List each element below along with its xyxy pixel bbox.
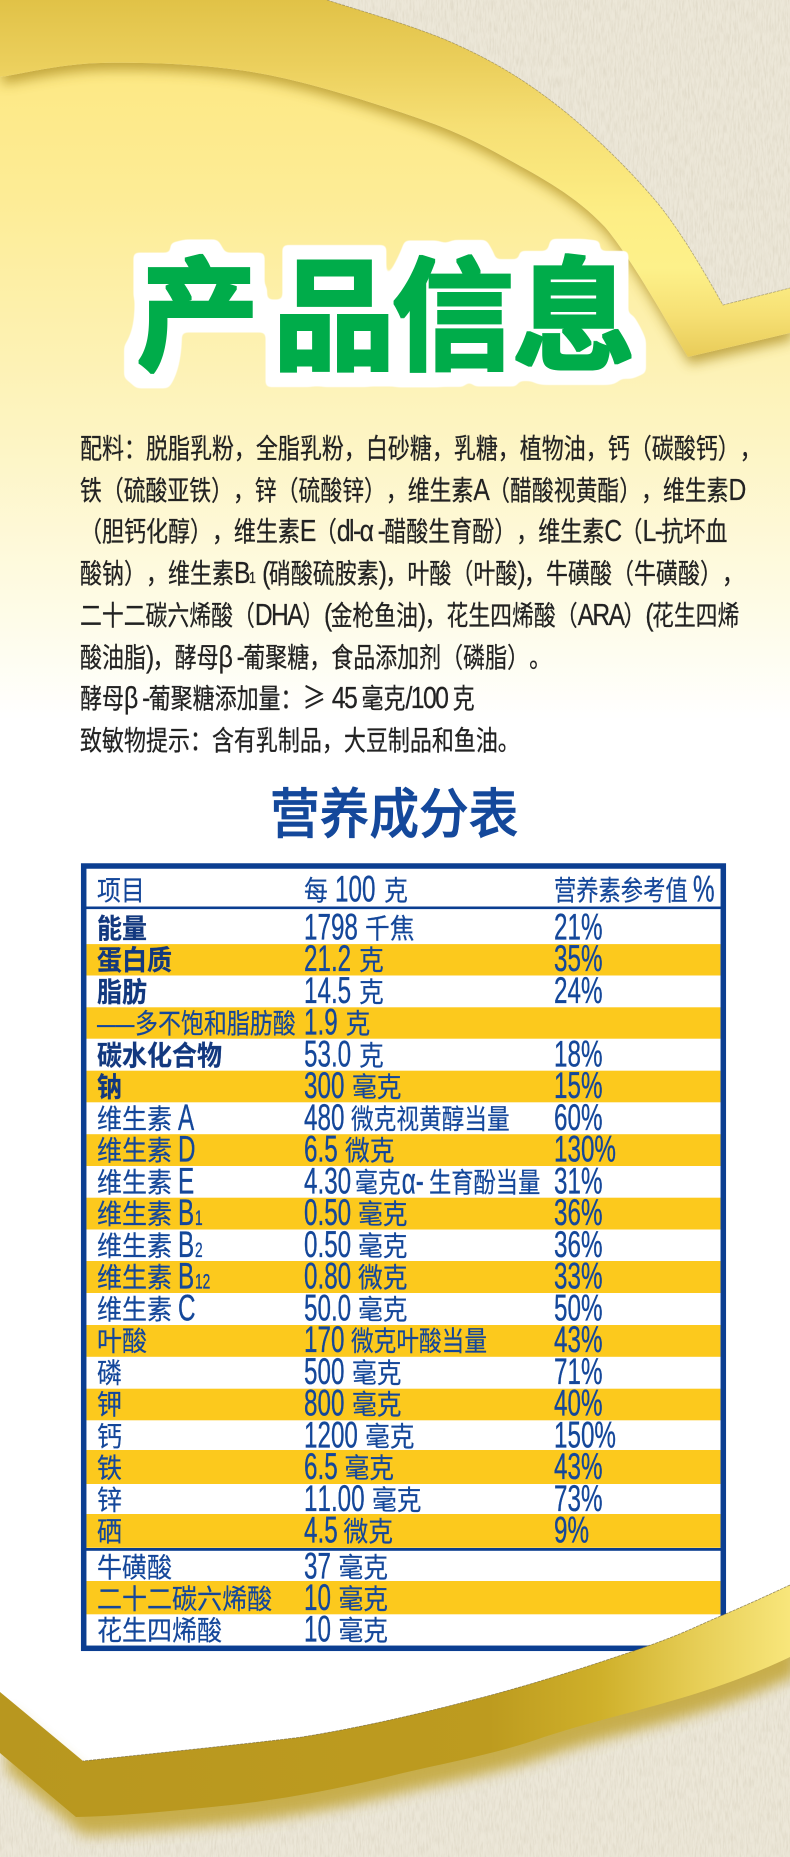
row: 维生素 B2: 2 <box>195 1238 203 1262</box>
nutrition table <box>84 866 723 1650</box>
row: 牛磺酸: 毫克 <box>338 1552 388 1583</box>
row: 维生素 B12: 微克 <box>358 1262 407 1294</box>
row: 钠: 毫克 <box>352 1071 401 1103</box>
row: 维生素 C: 50% <box>554 1287 602 1329</box>
row: 钾 <box>86 1383 720 1424</box>
row: 钙: 钙 <box>97 1421 122 1452</box>
table header row <box>97 869 715 910</box>
row: 脂肪: 14.5 <box>304 970 351 1011</box>
ingredients text block: 致敏物提示：含有乳制品，大豆制品和鱼油。 <box>80 726 520 757</box>
row: 维生素 C <box>97 1287 602 1329</box>
title: 产品信息: 产品信息 <box>137 250 635 386</box>
row: 维生素 A: 60% <box>554 1097 602 1138</box>
row: 铁: 毫克 <box>344 1452 394 1484</box>
row: 碳水化合物: 碳水化合物 <box>97 1040 222 1071</box>
row: 钙: 150% <box>554 1414 616 1456</box>
row: 维生素 B1: 0.50 <box>304 1192 351 1233</box>
row: 牛磺酸: 37 <box>304 1545 331 1587</box>
row: 花生四烯酸: 10 <box>304 1609 331 1650</box>
row: 二十二碳六烯酸: 10 <box>304 1577 331 1618</box>
shadow cast by top ribbon on the panel <box>0 62 790 372</box>
row: 锌: 11.00 <box>304 1478 365 1519</box>
row: 维生素 B12: 33% <box>554 1256 602 1297</box>
row: 维生素 B2: 毫克 <box>358 1230 407 1262</box>
ingredients text block: 铁（硫酸亚铁），锌（硫酸锌），维生素A（醋酸视黄酯），维生素D <box>80 472 745 507</box>
row: 硒: 9% <box>554 1510 589 1551</box>
row: 蛋白质: 35% <box>554 938 602 979</box>
row: 碳水化合物: 18% <box>554 1033 602 1075</box>
row: 维生素 A: A <box>178 1097 194 1138</box>
row: 维生素 E: 31% <box>554 1160 602 1202</box>
ingredients text block: （胆钙化醇），维生素E（dl-α -醋酸生育酚），维生素C（L-抗坏血 <box>80 513 727 548</box>
row: 维生素 B2: 维生素 <box>97 1230 172 1262</box>
row: 维生素 B1: 毫克 <box>358 1198 407 1230</box>
row: 能量: 1798 <box>304 906 358 948</box>
row: 钠: 15% <box>554 1065 602 1106</box>
top ribbon band <box>0 0 790 357</box>
row: 脂肪: 脂肪 <box>97 976 147 1008</box>
table header row: % <box>693 869 715 910</box>
row: 铁 <box>86 1446 720 1487</box>
row: 钙: 1200 <box>304 1414 358 1456</box>
row: 能量 <box>97 906 602 948</box>
table header row: 每 <box>304 876 328 907</box>
row: 铁: 6.5 <box>304 1446 338 1487</box>
row: 花生四烯酸 <box>97 1609 388 1650</box>
row: 维生素 D <box>86 1128 720 1170</box>
row: 二十二碳六烯酸: 二十二碳六烯酸 <box>97 1583 272 1615</box>
row: 维生素 C: 维生素 <box>97 1294 172 1325</box>
row: 维生素 D: 6.5 <box>304 1128 338 1170</box>
row: 维生素 E <box>97 1160 602 1202</box>
ingredients text block: 酸油脂)，酵母β -葡聚糖，食品添加剂（磷脂）。 <box>80 639 551 674</box>
row: 维生素 B12: 0.80 <box>304 1256 351 1297</box>
row: 叶酸: 微克叶酸当量 <box>351 1327 487 1357</box>
row: 硒: 4.5 <box>304 1510 338 1551</box>
row: 维生素 C: 50.0 <box>304 1287 351 1329</box>
row: 叶酸: 170 <box>304 1319 344 1360</box>
row: 碳水化合物 <box>97 1033 602 1075</box>
row: 锌: 毫克 <box>372 1484 421 1516</box>
row: 维生素 B12 <box>86 1256 720 1297</box>
row: 钠 <box>86 1065 720 1106</box>
row: 维生素 C: C <box>178 1287 196 1329</box>
row: 维生素 D: 维生素 <box>97 1135 172 1166</box>
row: 维生素 B2: B <box>178 1224 194 1265</box>
row: 多不饱和脂肪酸: 1.9 <box>304 1001 338 1043</box>
row: 维生素 B12: 12 <box>195 1270 210 1293</box>
row: 维生素 B2: 0.50 <box>304 1224 351 1265</box>
ingredients text block: 配料：脱脂乳粉，全脂乳粉，白砂糖，乳糖，植物油，钙（碳酸钙）， <box>80 434 762 465</box>
row: 维生素 E: α- <box>402 1160 424 1202</box>
row: 维生素 B12: B <box>178 1256 194 1297</box>
row: 硒: 硒 <box>97 1516 122 1547</box>
row: 花生四烯酸: 毫克 <box>338 1615 388 1647</box>
row: 维生素 B2 <box>97 1224 602 1265</box>
row: 维生素 D: D <box>178 1128 196 1170</box>
row: 维生素 D: 微克 <box>345 1135 394 1166</box>
row: 磷: 毫克 <box>352 1357 401 1389</box>
row: 多不饱和脂肪酸: —— <box>97 1009 135 1039</box>
row: 能量: 21% <box>554 906 602 948</box>
row: 碳水化合物: 53.0 <box>304 1033 351 1075</box>
row: 维生素 B12: 维生素 <box>97 1262 172 1293</box>
row: 钠: 钠 <box>97 1071 122 1103</box>
row: 蛋白质: 21.2 <box>304 938 351 979</box>
ingredients text block: 酵母β -葡聚糖添加量：≥ 45 毫克/100 克 <box>80 675 475 717</box>
row: 磷: 500 <box>304 1351 344 1392</box>
table header row: 项目 <box>97 877 145 907</box>
row: 维生素 B2: 36% <box>554 1224 602 1265</box>
row: 脂肪: 24% <box>554 970 602 1011</box>
row: 钠: 300 <box>304 1065 344 1106</box>
row: 维生素 B1: 1 <box>195 1206 203 1230</box>
row: 蛋白质: 蛋白质 <box>97 944 172 976</box>
row: 钾: 40% <box>554 1383 602 1424</box>
row: 维生素 B1 <box>86 1192 720 1233</box>
row: 锌 <box>97 1478 602 1519</box>
table header row: 营养素参考值 <box>554 876 688 907</box>
row: 磷: 71% <box>554 1351 602 1392</box>
row: 蛋白质: 克 <box>359 944 384 976</box>
row: 叶酸 <box>86 1319 720 1360</box>
row: 铁: 铁 <box>97 1453 122 1484</box>
row: 维生素 D: 130% <box>554 1128 616 1170</box>
row: 钙 <box>97 1414 616 1456</box>
row: 铁: 43% <box>554 1446 602 1487</box>
row: 钾: 钾 <box>97 1389 122 1420</box>
row: 维生素 B1: 36% <box>554 1192 602 1233</box>
row: 钾: 800 <box>304 1383 344 1424</box>
row: 维生素 A: 480 <box>304 1097 344 1138</box>
row: 维生素 E: 生育酚当量 <box>429 1168 540 1198</box>
row: 脂肪: 克 <box>359 976 384 1008</box>
row: 脂肪 <box>97 970 602 1011</box>
ingredients text block: 酸钠），维生素B1 (硝酸硫胺素)，叶酸（叶酸)，牛磺酸（牛磺酸）， <box>80 555 744 590</box>
row: 锌: 73% <box>554 1478 602 1519</box>
row: 二十二碳六烯酸: 毫克 <box>338 1583 388 1615</box>
row: 维生素 A: 微克视黄醇当量 <box>351 1104 510 1135</box>
row: 硒 <box>86 1510 720 1551</box>
row: 维生素 B1: 维生素 <box>97 1198 172 1230</box>
row: 花生四烯酸: 花生四烯酸 <box>97 1615 222 1646</box>
row: 碳水化合物: 克 <box>359 1040 384 1071</box>
row: 多不饱和脂肪酸: 多不饱和脂肪酸 <box>135 1009 296 1040</box>
row: 能量: 能量 <box>97 913 147 944</box>
heading: 营养成分表: 营养成分表 <box>270 784 518 844</box>
row: 磷: 磷 <box>97 1357 122 1389</box>
row: 叶酸: 叶酸 <box>97 1326 147 1357</box>
ingredients text block <box>80 434 762 757</box>
row: 维生素 E: E <box>178 1160 194 1202</box>
row: 维生素 A: 维生素 <box>97 1103 172 1135</box>
row: 锌: 锌 <box>97 1484 122 1516</box>
row: 维生素 E: 维生素 <box>97 1167 172 1198</box>
bottom ribbon band <box>0 1585 790 1835</box>
table header row: 100 <box>335 869 375 910</box>
row: 维生素 C: 毫克 <box>358 1294 407 1325</box>
row: 牛磺酸: 牛磺酸 <box>97 1552 172 1583</box>
row: 能量: 千焦 <box>365 913 414 944</box>
row: 维生素 A <box>97 1097 602 1138</box>
table header row: 克 <box>384 876 408 907</box>
row: 维生素 E: 毫克 <box>355 1168 401 1198</box>
row: 钙: 毫克 <box>365 1421 414 1452</box>
row: 多不饱和脂肪酸 <box>86 1001 720 1043</box>
row: 牛磺酸 <box>97 1545 388 1587</box>
ingredients text block: 二十二碳六烯酸（DHA）(金枪鱼油)，花生四烯酸（ARA）(花生四烯 <box>80 597 739 632</box>
row: 钾: 毫克 <box>352 1389 401 1421</box>
row: 二十二碳六烯酸 <box>86 1577 720 1618</box>
row: 叶酸: 43% <box>554 1319 602 1360</box>
row: 多不饱和脂肪酸: 克 <box>346 1008 370 1039</box>
row: 硒: 微克 <box>344 1516 393 1548</box>
row: 维生素 E: 4.30 <box>304 1160 351 1202</box>
row: 维生素 B1: B <box>178 1192 194 1233</box>
row: 蛋白质 <box>86 938 720 979</box>
row: 磷 <box>97 1351 602 1392</box>
